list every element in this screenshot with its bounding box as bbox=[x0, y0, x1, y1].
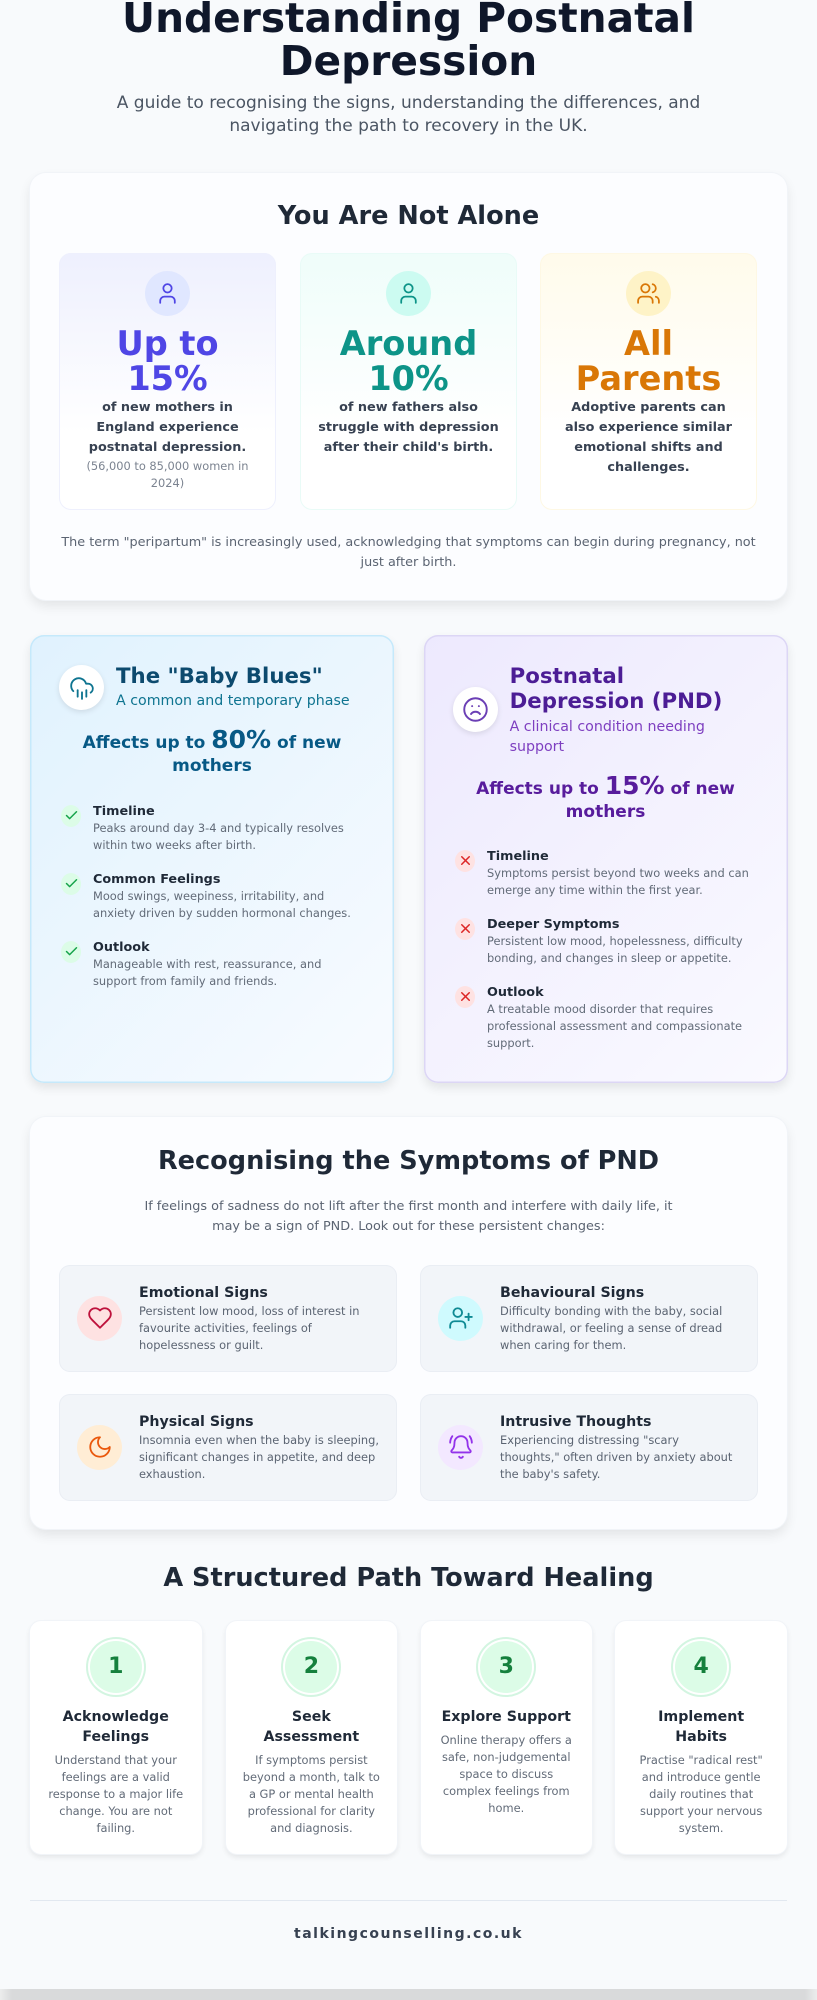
stat text: postnatal depression. bbox=[89, 440, 246, 455]
item title: Outlook bbox=[487, 985, 544, 1000]
number badge: 3 bbox=[499, 1654, 514, 1679]
step 1 bbox=[30, 1621, 202, 1854]
item: timeline bbox=[455, 849, 749, 897]
stat card: mothers bbox=[59, 253, 276, 510]
card text bbox=[500, 1304, 722, 1352]
item text: anxiety driven by sudden hormonal changes. bbox=[93, 906, 351, 920]
step title: Implement bbox=[658, 1709, 744, 1725]
item title: Common Feelings bbox=[93, 872, 220, 887]
item text: support from family and friends. bbox=[93, 974, 277, 988]
stat text: struggle with depression bbox=[318, 420, 499, 435]
icon: heart bbox=[77, 1296, 122, 1341]
step text: beyond a month, talk to bbox=[243, 1770, 380, 1784]
step text: response to a major life bbox=[48, 1787, 183, 1801]
number badge bbox=[285, 1640, 337, 1692]
step text bbox=[441, 1733, 572, 1815]
item text bbox=[487, 934, 743, 965]
item text: bonding, and changes in sleep or appetite. bbox=[487, 951, 731, 965]
stat figure: Up to bbox=[116, 324, 219, 363]
panel title bbox=[510, 664, 722, 714]
subtitle: navigating the path to recovery in the UK. bbox=[229, 116, 588, 136]
statistic: Affects up to 80% of new bbox=[83, 725, 341, 754]
card text: exhaustion. bbox=[139, 1467, 205, 1481]
stat text bbox=[89, 400, 246, 455]
item text: Symptoms persist beyond two weeks and can bbox=[487, 866, 749, 880]
stat figure: All bbox=[624, 324, 673, 363]
item text: support. bbox=[487, 1036, 534, 1050]
number badge: 2 bbox=[304, 1654, 319, 1679]
heading: you are not alone: You Are Not Alone bbox=[278, 201, 539, 231]
step title: Seek bbox=[292, 1709, 331, 1725]
title bbox=[122, 0, 695, 85]
stat figure bbox=[116, 324, 219, 398]
stat text bbox=[318, 400, 499, 455]
stat figure: Around bbox=[340, 324, 477, 363]
item: timeline bbox=[61, 804, 344, 852]
panel: postnatal depression bbox=[424, 635, 788, 1082]
panel title: The "Baby Blues" bbox=[116, 664, 323, 689]
step text: failing. bbox=[96, 1821, 135, 1835]
card text bbox=[139, 1304, 359, 1352]
intro text bbox=[144, 1199, 673, 1234]
step text: home. bbox=[488, 1801, 524, 1815]
statistic: Affects up to 15% of new bbox=[476, 771, 735, 800]
icon: check bbox=[61, 873, 81, 895]
stat note: 2024) bbox=[151, 476, 184, 490]
item text: Peaks around day 3-4 and typically resolves bbox=[93, 821, 344, 835]
number badge bbox=[480, 1640, 532, 1692]
item title: Timeline bbox=[93, 804, 155, 819]
stat figure: 15% bbox=[127, 359, 208, 398]
stat card: all parents bbox=[540, 253, 757, 510]
item text: within two weeks after birth. bbox=[93, 838, 256, 852]
card text: hopelessness or guilt. bbox=[139, 1338, 263, 1352]
intro text: may be a sign of PND. Look out for these persistent changes: bbox=[212, 1219, 605, 1234]
item text: Persistent low mood, hopelessness, difficulty bbox=[487, 934, 743, 948]
statistic: mothers bbox=[172, 756, 252, 776]
icon: check bbox=[61, 805, 81, 827]
card text: Persistent low mood, loss of interest in bbox=[139, 1304, 359, 1318]
step title: Feelings bbox=[82, 1729, 149, 1745]
step text: feelings are a valid bbox=[62, 1770, 170, 1784]
step 2 bbox=[226, 1621, 397, 1854]
stat card: fathers bbox=[300, 253, 517, 510]
card text: when caring for them. bbox=[500, 1338, 626, 1352]
item text bbox=[93, 821, 344, 852]
icon: check bbox=[61, 941, 81, 963]
item title: Timeline bbox=[487, 849, 549, 864]
icon: moon bbox=[77, 1425, 122, 1470]
card title: Physical Signs bbox=[139, 1414, 254, 1430]
stat text: after their child's birth. bbox=[324, 440, 493, 455]
item text bbox=[93, 889, 351, 920]
item text: emerge any time within the first year. bbox=[487, 883, 703, 897]
panel subtitle: support bbox=[510, 738, 564, 754]
statistic: mothers bbox=[566, 802, 645, 822]
step 4 bbox=[615, 1621, 787, 1854]
step title bbox=[658, 1709, 744, 1745]
stat figure: 10% bbox=[368, 359, 449, 398]
step text: If symptoms persist bbox=[255, 1753, 368, 1767]
item text bbox=[93, 957, 321, 988]
step text bbox=[48, 1753, 183, 1835]
intro text: If feelings of sadness do not lift after the first month and interfere with daily life, it bbox=[144, 1199, 673, 1214]
card title: Intrusive Thoughts bbox=[500, 1414, 651, 1430]
panel: baby blues bbox=[30, 635, 394, 1082]
step title bbox=[62, 1709, 169, 1745]
note: peripartum: The term "peripartum" is increasingly used, acknowledging that symptoms can begin during pregnancy, not bbox=[61, 535, 756, 550]
stat note bbox=[86, 459, 249, 490]
card text: Difficulty bonding with the baby, social bbox=[500, 1304, 722, 1318]
card title: Emotional Signs bbox=[139, 1285, 268, 1301]
panel subtitle bbox=[510, 718, 705, 754]
item: deeper symptoms bbox=[455, 917, 743, 965]
card text bbox=[139, 1433, 379, 1481]
item title: Deeper Symptoms bbox=[487, 917, 620, 932]
subtitle: A guide to recognising the signs, understanding the differences, and bbox=[117, 93, 700, 113]
step title: Assessment bbox=[264, 1729, 359, 1745]
step text bbox=[243, 1753, 380, 1835]
number badge bbox=[90, 1640, 142, 1692]
panel: recognising the symptoms bbox=[30, 1117, 787, 1529]
heading: path toward healing: A Structured Path Toward Healing bbox=[163, 1563, 654, 1593]
heading: symptoms: Recognising the Symptoms of PND bbox=[158, 1146, 659, 1176]
step title: Explore Support bbox=[442, 1709, 571, 1725]
stat text: of new mothers in bbox=[102, 400, 233, 415]
icon: bell bbox=[438, 1425, 483, 1470]
item: common feelings bbox=[61, 872, 351, 920]
step text: Understand that your bbox=[55, 1753, 177, 1767]
item: outlook bbox=[455, 985, 742, 1050]
step title: Habits bbox=[675, 1729, 727, 1745]
number badge bbox=[675, 1640, 727, 1692]
symptom card: physical bbox=[59, 1394, 397, 1501]
step title bbox=[264, 1709, 359, 1745]
panel subtitle: A clinical condition needing bbox=[510, 718, 705, 734]
number badge: 4 bbox=[694, 1654, 709, 1679]
stat text: challenges. bbox=[607, 460, 690, 475]
symptom card: intrusive thoughts bbox=[420, 1394, 758, 1501]
symptom card: emotional bbox=[59, 1265, 397, 1372]
icon: cross bbox=[455, 850, 475, 872]
icon: parents bbox=[626, 271, 671, 316]
stat text: of new fathers also bbox=[339, 400, 478, 415]
step text: change. You are not bbox=[59, 1804, 172, 1818]
subtitle bbox=[116, 93, 700, 136]
panel subtitle: A common and temporary phase bbox=[116, 693, 350, 709]
footer: website: talkingcounselling.co.uk bbox=[294, 1926, 523, 1942]
title: Depression bbox=[280, 37, 537, 85]
symptom card: behavioural bbox=[420, 1265, 758, 1372]
stat text: England experience bbox=[96, 420, 239, 435]
card text: significant changes in appetite, and deep bbox=[139, 1450, 375, 1464]
step text: Online therapy offers a bbox=[441, 1733, 572, 1747]
step text: safe, non-judgemental bbox=[442, 1750, 570, 1764]
step title: Acknowledge bbox=[63, 1709, 169, 1725]
step 3 bbox=[420, 1621, 592, 1854]
step text: daily routines that bbox=[649, 1787, 753, 1801]
icon: cross bbox=[455, 918, 475, 940]
step text: support your nervous bbox=[640, 1804, 762, 1818]
item text bbox=[487, 1002, 742, 1050]
note: peripartum: just after birth. bbox=[361, 555, 456, 570]
stat note: (56,000 to 85,000 women in bbox=[86, 459, 249, 473]
step text: and introduce gentle bbox=[642, 1770, 761, 1784]
step text: Practise "radical rest" bbox=[640, 1753, 763, 1767]
card text bbox=[500, 1433, 732, 1481]
icon: rain cloud bbox=[59, 665, 104, 710]
statistic bbox=[476, 771, 735, 822]
icon: frown bbox=[452, 687, 498, 732]
panel title: Postnatal bbox=[510, 664, 624, 689]
stat text: also experience similar bbox=[565, 420, 732, 435]
card text: Insomnia even when the baby is sleeping, bbox=[139, 1433, 379, 1447]
card text: favourite activities, feelings of bbox=[139, 1321, 312, 1335]
stat text bbox=[565, 400, 732, 475]
stat text: emotional shifts and bbox=[574, 440, 723, 455]
icon: father bbox=[386, 271, 431, 316]
step text: space to discuss bbox=[459, 1767, 553, 1781]
item text: professional assessment and compassionate bbox=[487, 1019, 742, 1033]
stat figure bbox=[576, 324, 721, 398]
icon: mother bbox=[145, 271, 190, 316]
icon: cross bbox=[455, 986, 475, 1008]
item text: Manageable with rest, reassurance, and bbox=[93, 957, 321, 971]
step text: complex feelings from bbox=[443, 1784, 570, 1798]
item text: A treatable mood disorder that requires bbox=[487, 1002, 713, 1016]
stat figure bbox=[340, 324, 477, 398]
statistic bbox=[82, 725, 341, 776]
card text: Experiencing distressing "scary bbox=[500, 1433, 679, 1447]
panel title: Depression (PND) bbox=[510, 689, 722, 714]
step text: professional for clarity bbox=[248, 1804, 375, 1818]
card text: withdrawal, or feeling a sense of dread bbox=[500, 1321, 722, 1335]
item text: Mood swings, weepiness, irritability, and bbox=[93, 889, 324, 903]
step text: and diagnosis. bbox=[270, 1821, 353, 1835]
card text: the baby's safety. bbox=[500, 1467, 600, 1481]
item: outlook bbox=[61, 940, 321, 988]
number badge: 1 bbox=[108, 1654, 123, 1679]
step text: a GP or mental health bbox=[249, 1787, 374, 1801]
icon: user plus bbox=[438, 1296, 483, 1341]
stat figure: Parents bbox=[576, 359, 721, 398]
card title: Behavioural Signs bbox=[500, 1285, 644, 1301]
step text: system. bbox=[679, 1821, 724, 1835]
card text: thoughts," often driven by anxiety about bbox=[500, 1450, 732, 1464]
panel: you are not alone bbox=[30, 173, 787, 600]
item text bbox=[487, 866, 749, 897]
step text bbox=[640, 1753, 763, 1835]
note: peripartum bbox=[61, 535, 756, 570]
stat text: Adoptive parents can bbox=[571, 400, 726, 415]
item title: Outlook bbox=[93, 940, 150, 955]
